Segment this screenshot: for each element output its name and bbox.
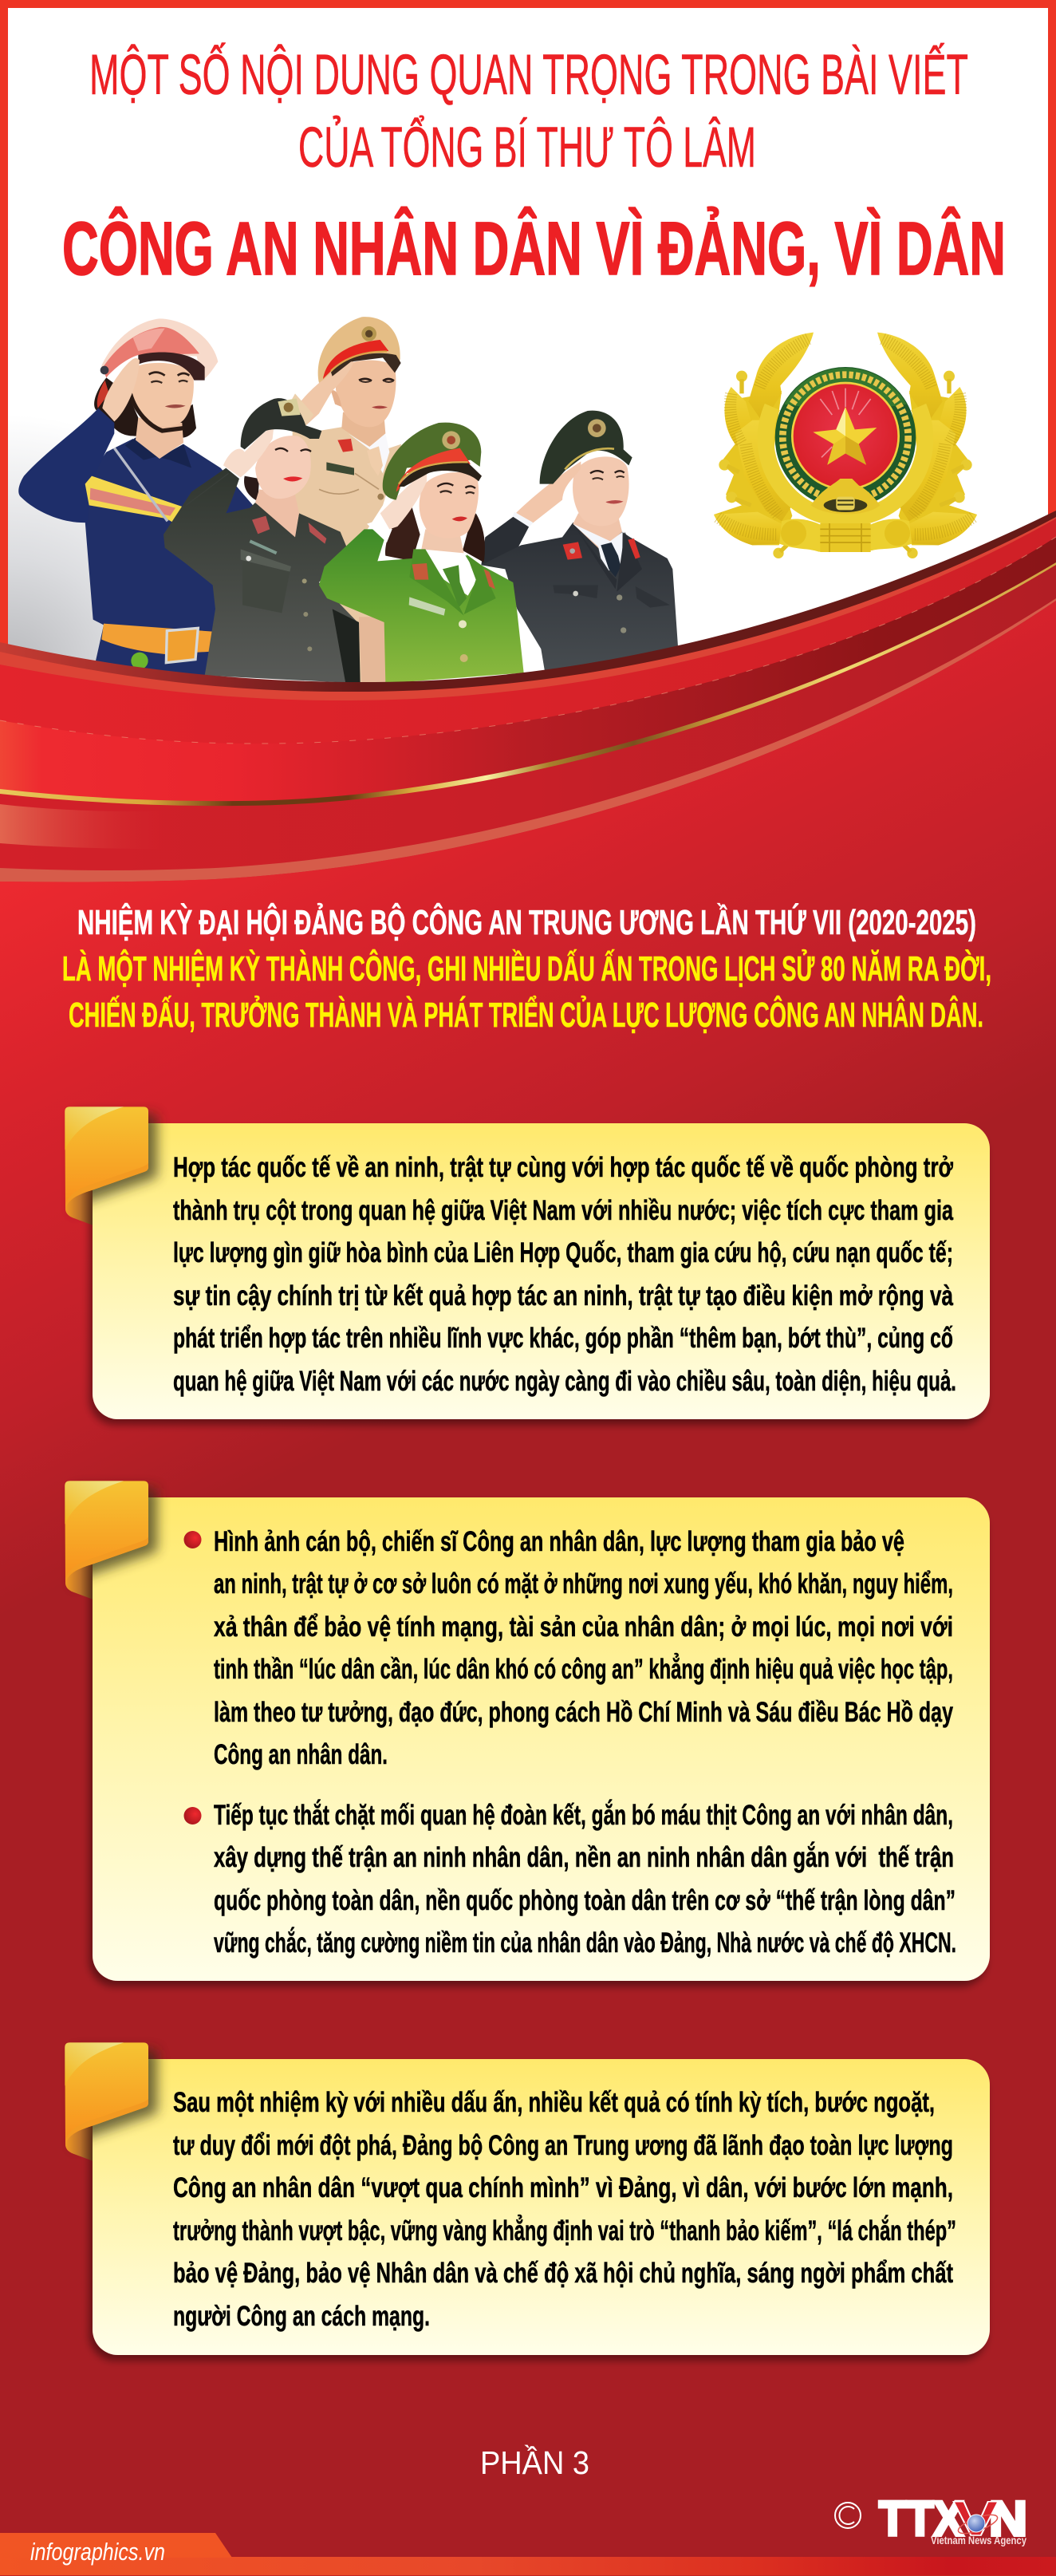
emblem: red disc with star — [792, 383, 899, 489]
logo: TTXVN Vietnam News Agency: V — [953, 2491, 999, 2546]
card 2 corner ribbon icon — [65, 1481, 157, 1600]
figure: female officer in green uniform — [319, 423, 524, 684]
panel: card 2 image of officers and people — [65, 1481, 990, 1981]
card 3 text — [173, 2087, 956, 2332]
panel: card 3 closing statement — [65, 2042, 990, 2355]
card 2 bullet 2 — [183, 1807, 201, 1825]
figure: female officer in dark uniform — [164, 398, 361, 684]
card 2 bullet 1 — [183, 1531, 201, 1548]
card 2 paragraph 2 — [214, 1799, 956, 1959]
figure: firefighter in navy uniform — [18, 318, 255, 680]
emblem: green ring with wheat — [775, 367, 916, 508]
card 3 text: người Công an cách mạng. — [173, 2301, 430, 2332]
logo: TTXVN Vietnam News Agency: Vietnam News Agency — [931, 2534, 1026, 2546]
emblem: People's Public Security badge — [714, 333, 977, 558]
logo: TTXVN Vietnam News Agency: N — [989, 2491, 1027, 2546]
logo: copyright symbol — [835, 2503, 861, 2528]
card 1 background — [93, 1123, 990, 1419]
panel: card 1 international cooperation — [65, 1107, 990, 1419]
figure: male officer in dark uniform — [481, 411, 678, 673]
emblem: gold ribbon bow — [779, 519, 912, 552]
illustration: saluting officers — [18, 317, 678, 684]
footer: gradient bar with orange tab — [0, 2533, 1056, 2576]
card 2 background — [93, 1497, 990, 1981]
red background panel — [0, 601, 1056, 2576]
title: line 2: CỦA TỔNG BÍ THƯ TÔ LÂM — [298, 116, 756, 179]
card 1 corner ribbon icon — [65, 1107, 157, 1225]
emblem: gear and book — [811, 479, 880, 515]
card 2 paragraph 1 — [214, 1526, 953, 1770]
figure: traffic officer in tan uniform — [285, 317, 401, 684]
logo: TTXVN Vietnam News Agency: TTX — [879, 2491, 963, 2546]
logo: TTXVN Vietnam News Agency — [879, 2491, 1027, 2546]
footer: website label: infographics.vn — [30, 2538, 165, 2566]
card 3 corner ribbon icon — [65, 2042, 157, 2161]
part label: PHẦN 3 — [480, 2444, 589, 2481]
emblem: gold wreath — [714, 333, 977, 558]
ribbon swoosh: curved red bands with gold line — [0, 511, 1056, 1197]
card 3 background — [93, 2059, 990, 2355]
card 2 paragraph 1: Công an nhân dân. — [214, 1739, 388, 1770]
card 1 text — [173, 1152, 956, 1397]
